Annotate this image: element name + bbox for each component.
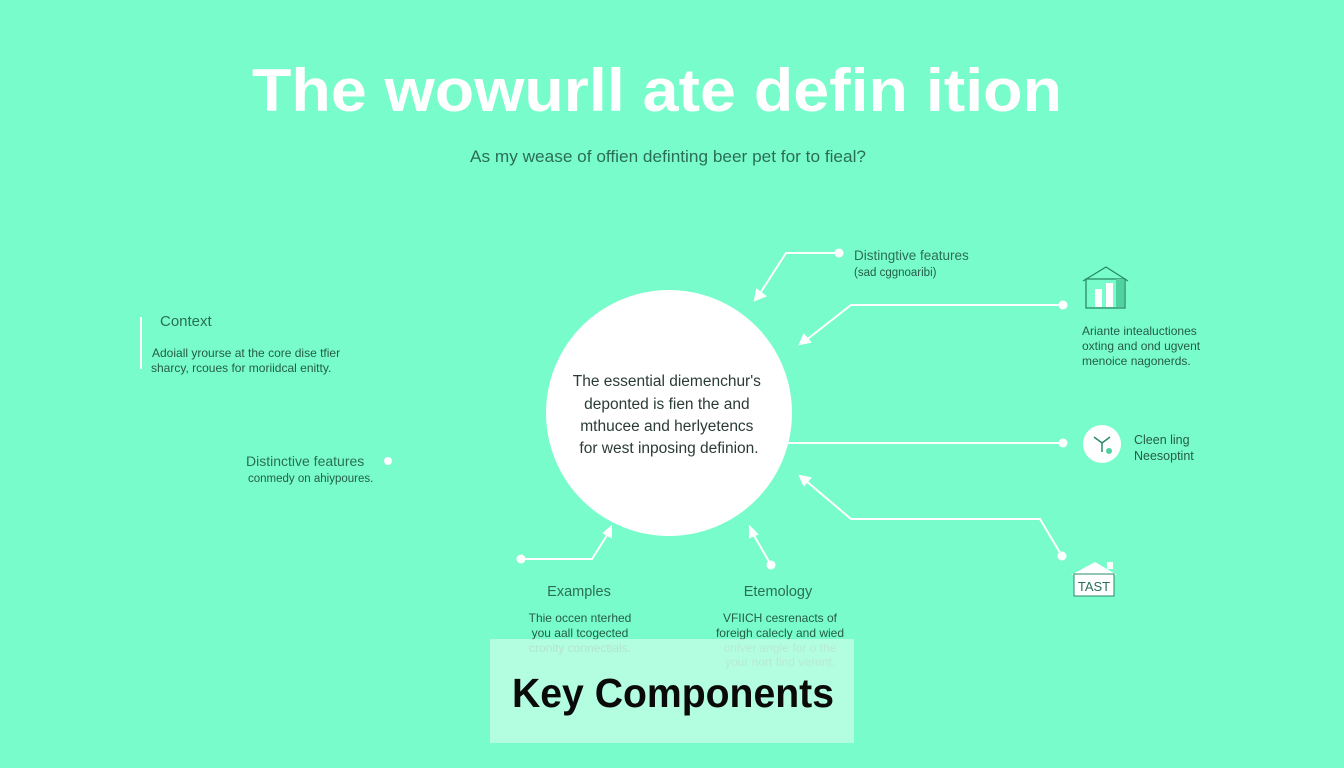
title: The wowurll ate defin ition [252,57,1062,124]
panel: distinctive features left [246,453,373,485]
center circle: The essential diemenchur's [573,373,761,390]
text: right panel 1: menoice nagonerds. [1082,354,1191,368]
center circle: for west inposing definion. [579,440,759,457]
panel: etemology: your nort find verent. [725,655,835,669]
subtitle: As my wease of offien definting beer pet for to fieal? [470,147,866,166]
text: right panel 2: Neesoptint [1134,449,1194,463]
center circle [546,290,792,536]
panel: etemology [716,584,844,669]
panel: distinctive features left: conmedy on ahiypoures. [248,473,373,485]
panel: distinctive features top right [854,248,969,279]
panel: context [140,313,340,375]
key components label box: Key Components [512,670,834,716]
text: right panel 1: Ariante intealuctiones [1082,324,1197,338]
panel: context: sharcy, rcoues for moriidcal enitty. [151,361,331,375]
panel: distinctive features top right: Distingtive features [854,248,969,263]
text: right panel 1 [1082,324,1201,368]
text: right panel 1: oxting and ond ugvent [1082,339,1201,353]
panel: context: Adoiall yrourse at the core dise tfier [152,346,340,360]
panel: examples: Thie occen nterhed [529,611,631,625]
center circle: deponted is fien the and [584,396,750,413]
panel: context: Context [160,313,213,330]
panel: etemology: Etemology [744,584,813,600]
panel: etemology: onlver angle for o the [724,641,837,655]
panel: distinctive features left: Distinctive features [246,453,364,469]
panel: examples: cronity connectials. [529,641,631,655]
panel: examples [529,584,631,655]
panel: distinctive features top right: (sad cggnoaribi) [854,267,937,279]
icon: house chart [1083,267,1128,308]
connectors [385,250,1066,568]
icon: sprout circle [1083,425,1121,463]
center circle: mthucee and herlyetencs [580,418,754,435]
panel: examples: you aall tcogected [532,626,628,640]
panel: etemology: foreigh calecly and wied [716,626,844,640]
icon: TAST house [1071,562,1117,596]
panel: etemology: VFIICH cesrenacts of [723,611,838,625]
text: right panel 2 [1134,433,1194,463]
text: right panel 2: Cleen ling [1134,433,1190,447]
key components label box [490,639,854,743]
icon: TAST house: TAST [1078,579,1110,594]
panel: examples: Examples [547,584,611,600]
